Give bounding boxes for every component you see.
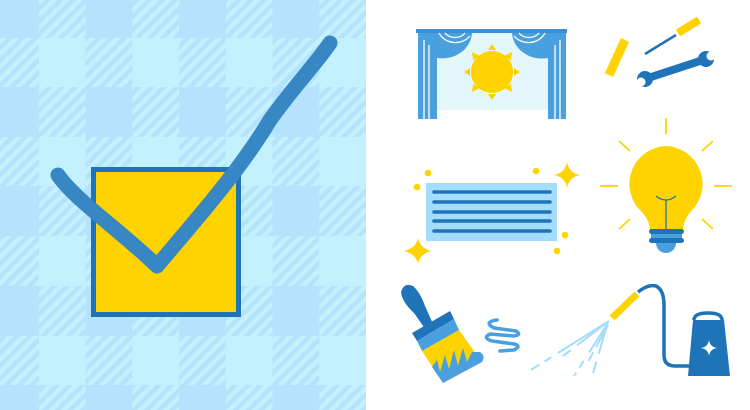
icon: light bulb xyxy=(600,118,732,253)
icon: paint brush xyxy=(401,285,484,383)
icon: tools xyxy=(609,20,716,87)
icon: air vent xyxy=(404,162,580,264)
panel: checkered background xyxy=(0,0,366,410)
checkbox xyxy=(94,170,238,314)
icon: curtain window with sun xyxy=(416,29,567,119)
icon: pressure washer xyxy=(518,286,730,378)
checkmark xyxy=(58,43,330,266)
icon: squiggle xyxy=(486,320,519,351)
